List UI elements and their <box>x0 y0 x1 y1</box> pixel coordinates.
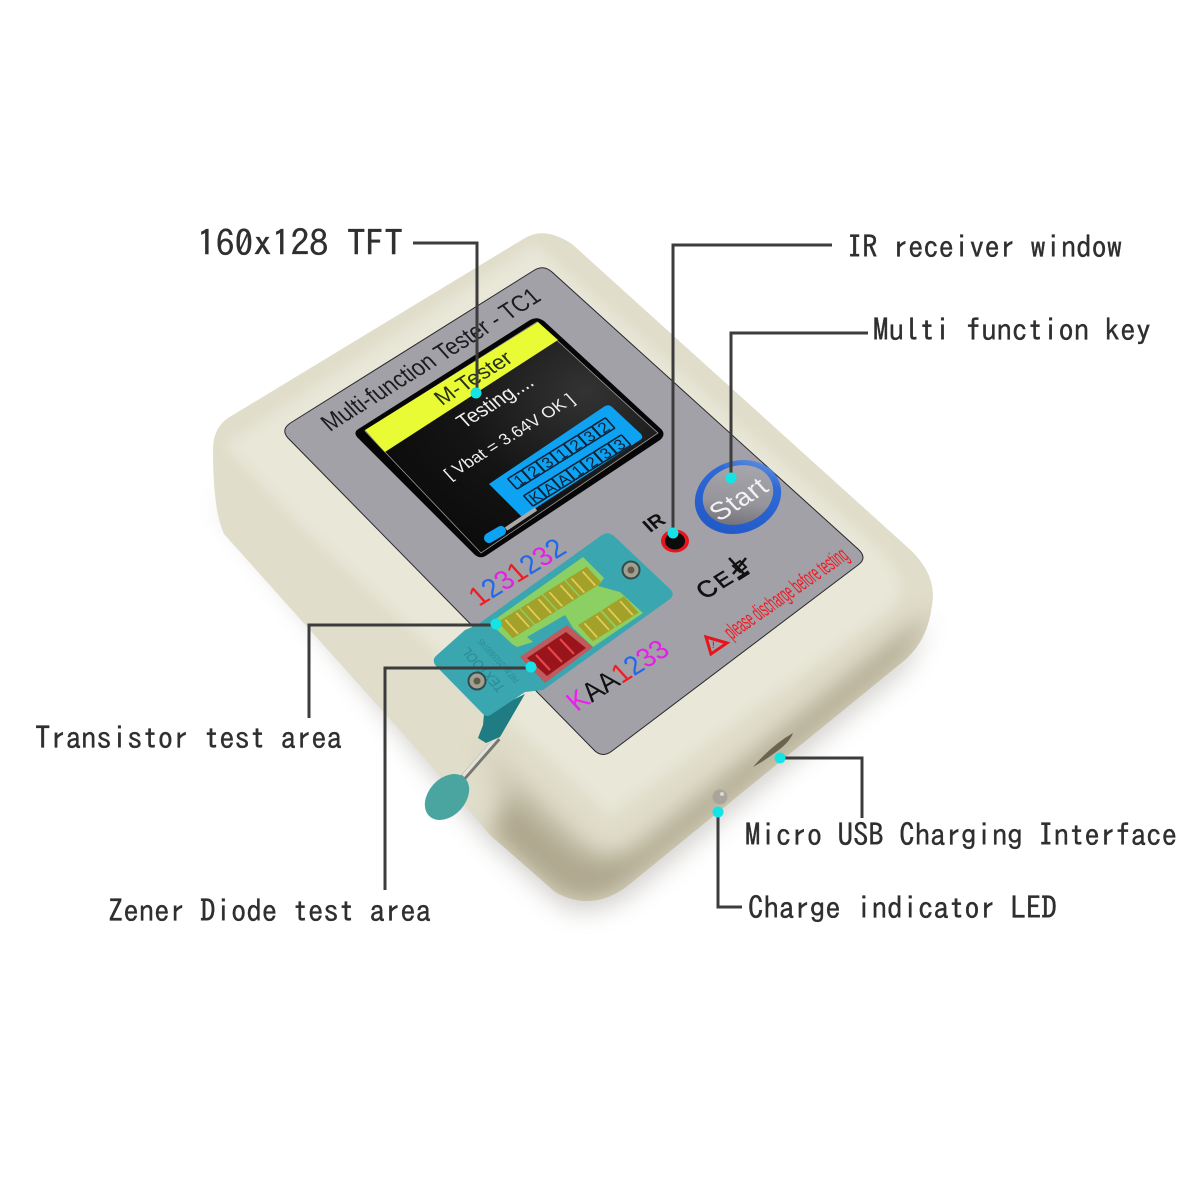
screen pin map: 1 <box>553 446 572 463</box>
screen pin map: 3 <box>597 445 616 463</box>
screen pin map: A <box>540 480 561 498</box>
screen pin map: 1 <box>569 463 588 480</box>
label: Charge indicator LED: Charge indicator LED <box>748 892 1057 923</box>
label: Transistor test area <box>35 618 502 753</box>
panel: gray faceplate <box>285 268 863 754</box>
screen pin map: A <box>554 471 575 489</box>
screen pin map: K <box>526 488 547 507</box>
label: Charge indicator LED <box>712 806 1057 923</box>
label: Multi function key: Multi function key <box>873 314 1151 345</box>
lever underside <box>478 694 525 743</box>
screen pin map: 3 <box>539 455 558 472</box>
screen: TFT display <box>355 318 664 557</box>
device: tester body <box>213 233 935 911</box>
green transistor slots <box>490 557 643 647</box>
socket: ZIF test socket <box>434 533 673 743</box>
lever markings: TEXTOOL <box>457 645 509 695</box>
screen pin map: 2 <box>595 420 614 437</box>
label: Zener Diode test area <box>108 662 536 926</box>
screen pin map: 2 <box>583 454 602 471</box>
label: IR receiver window: IR receiver window <box>847 231 1122 262</box>
label: Transistor test area: Transistor test area <box>35 722 342 753</box>
text: lower pin labels: KAA1233 <box>559 634 676 717</box>
port: micro USB slot <box>753 733 793 767</box>
screen title bar <box>365 322 558 452</box>
screen pin map: 1 <box>511 472 530 489</box>
icon: IR receiver: IR <box>639 510 671 537</box>
icon: CE and WEEE marks <box>690 558 749 604</box>
screen pin map: 2 <box>567 437 586 454</box>
red zener slots <box>520 625 593 683</box>
screen pin map: 2 <box>525 463 544 481</box>
icon: CE and WEEE marks: C <box>690 574 724 604</box>
icon: CE and WEEE marks: E <box>709 566 738 593</box>
label: 160x128 TFT <box>197 225 482 398</box>
label: Multi function key <box>726 314 1151 484</box>
label: Zener Diode test area: Zener Diode test area <box>108 895 431 926</box>
icon: lever stylus <box>416 737 498 829</box>
socket screws <box>468 562 640 690</box>
icon: charge LED <box>712 790 728 804</box>
socket plate <box>434 533 673 716</box>
label: Micro USB Charging Interface: Micro USB Charging Interface <box>745 819 1177 850</box>
screen pin map <box>489 405 642 517</box>
screen status text: Testing.... <box>452 371 539 433</box>
screen progress bar <box>489 509 536 538</box>
screen pin map: 3 <box>611 437 630 454</box>
screen title bar: M-Tester <box>429 346 518 410</box>
button: start key <box>684 448 792 546</box>
icon: warning triangle <box>706 637 727 654</box>
icon: IR receiver <box>639 510 689 552</box>
screen pin map: 3 <box>581 428 600 446</box>
button: start key: Start <box>703 472 774 526</box>
heading: product name: Multi-function Tester - TC1 <box>315 283 547 436</box>
text: upper pin numbers: 1231232 <box>462 532 572 612</box>
lever markings: PAT.No:2015600745 <box>476 637 522 684</box>
label: 160x128 TFT: 160x128 TFT <box>197 225 403 261</box>
screen status text: [ Vbat = 3.64V OK ] <box>440 390 578 483</box>
label: IR receiver window <box>668 231 1122 538</box>
text: please discharge before testing <box>718 542 853 644</box>
label: Micro USB Charging Interface <box>745 752 1177 850</box>
icon: warning triangle: ! <box>712 640 715 650</box>
